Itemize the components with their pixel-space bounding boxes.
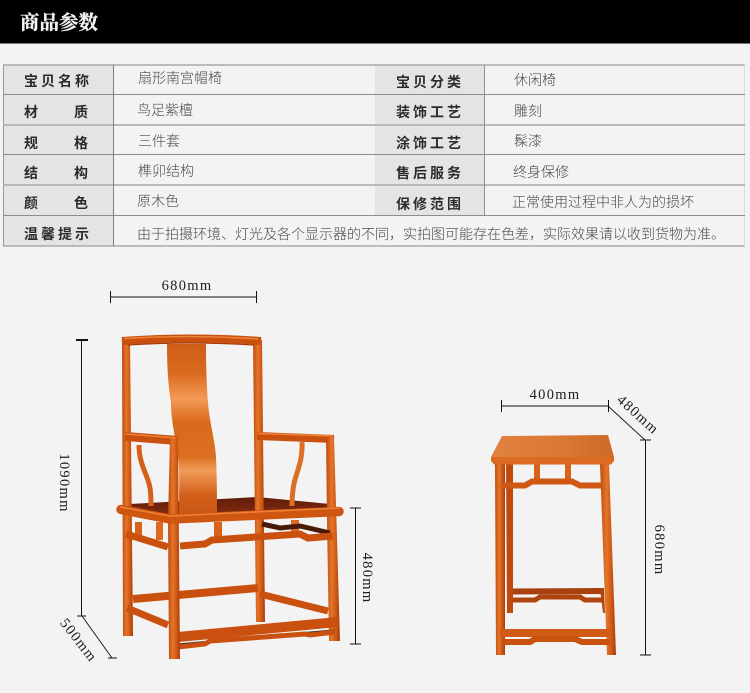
stretcher back left: [133, 588, 258, 599]
right column labels: 保修范围: [396, 196, 464, 212]
left column labels: 温馨提示: [24, 226, 92, 242]
height label: 1090mm: [56, 453, 72, 513]
left column values: 三件套: [138, 133, 180, 149]
left column labels: 质: [74, 104, 88, 120]
left column labels: 格: [74, 135, 88, 151]
depth label: 500mm: [56, 616, 100, 665]
left front post and leg: [168, 438, 180, 659]
right column values: [512, 72, 694, 210]
dimension: chair height: [56, 340, 88, 616]
curved arm support left: [139, 445, 151, 506]
parameter table: [3, 65, 745, 246]
right front post and leg: [326, 437, 340, 641]
seat surface: [122, 497, 332, 518]
stretcher left side: [127, 608, 168, 625]
dimension: seat height: [350, 508, 375, 644]
dimension: stool height: [640, 440, 667, 655]
right column labels: 宝贝分类: [396, 74, 464, 90]
dimension: chair width: [110, 278, 256, 303]
crest rail: [122, 337, 261, 345]
table grid: [3, 65, 745, 246]
right column values: 雕刻: [514, 103, 542, 119]
stool seat edge: [491, 457, 614, 464]
left column labels: 材: [24, 104, 38, 120]
left column labels: 颜: [24, 195, 38, 211]
right column labels: 售后服务: [396, 165, 464, 181]
right column values: 正常使用过程中非人为的损坏: [512, 194, 694, 210]
chair illustration: [56, 278, 375, 665]
stool seat top: [491, 435, 614, 457]
left column values: 鸟足紫檀: [137, 102, 193, 118]
left column values: 扇形南宫帽椅: [138, 70, 222, 86]
left column values: 榫卯结构: [138, 163, 194, 179]
dimension: stool depth: [608, 392, 662, 440]
left column labels: 宝贝名称: [24, 73, 92, 89]
stool height label: 680mm: [651, 525, 667, 575]
width label: 680mm: [162, 278, 212, 294]
right column values: 髹漆: [514, 133, 542, 149]
left column labels: 规: [24, 135, 38, 151]
stool back lower rails: [513, 591, 604, 600]
right column values: 休闲椅: [514, 72, 556, 88]
right column values: 终身保修: [513, 164, 569, 180]
notice text: 由于拍摄环境、灯光及各个显示器的不同，实拍图可能存在色差，实际效果请以收到货物为准。: [137, 226, 725, 242]
dimension: chair depth: [56, 616, 117, 665]
left column labels: 色: [74, 195, 88, 211]
title: 商品参数: [20, 12, 99, 34]
curved arm support right: [292, 442, 302, 506]
stool apron: [502, 464, 603, 486]
stool back legs: [506, 464, 605, 613]
left column labels: [24, 73, 92, 242]
stool width label: 400mm: [530, 387, 580, 403]
back splat: [167, 344, 217, 515]
left column labels: 构: [74, 165, 88, 181]
stool lower front rails: [500, 629, 610, 642]
seat front rails: [120, 507, 340, 519]
stool illustration: [491, 387, 667, 655]
apron under seat: [126, 520, 333, 547]
right armrest: [257, 434, 334, 439]
header bar: [0, 0, 750, 44]
stool left front leg: [495, 464, 505, 655]
stool right front leg: [600, 464, 616, 655]
right column labels: 装饰工艺: [396, 104, 464, 120]
right column labels: [396, 74, 464, 212]
right column labels: 涂饰工艺: [396, 135, 464, 151]
seat height label: 480mm: [359, 553, 375, 603]
dimension: stool width: [502, 387, 608, 412]
stool depth label: 480mm: [613, 392, 662, 438]
lower front footrest: [178, 622, 338, 647]
back right leg and post: [253, 340, 265, 622]
label cell backgrounds: [3, 65, 484, 246]
back left leg and post: [122, 340, 133, 636]
left column labels: 结: [24, 165, 38, 181]
stretcher right side: [260, 594, 328, 611]
left armrest: [125, 434, 178, 440]
left column values: [137, 70, 222, 209]
left column values: 原木色: [137, 193, 179, 209]
